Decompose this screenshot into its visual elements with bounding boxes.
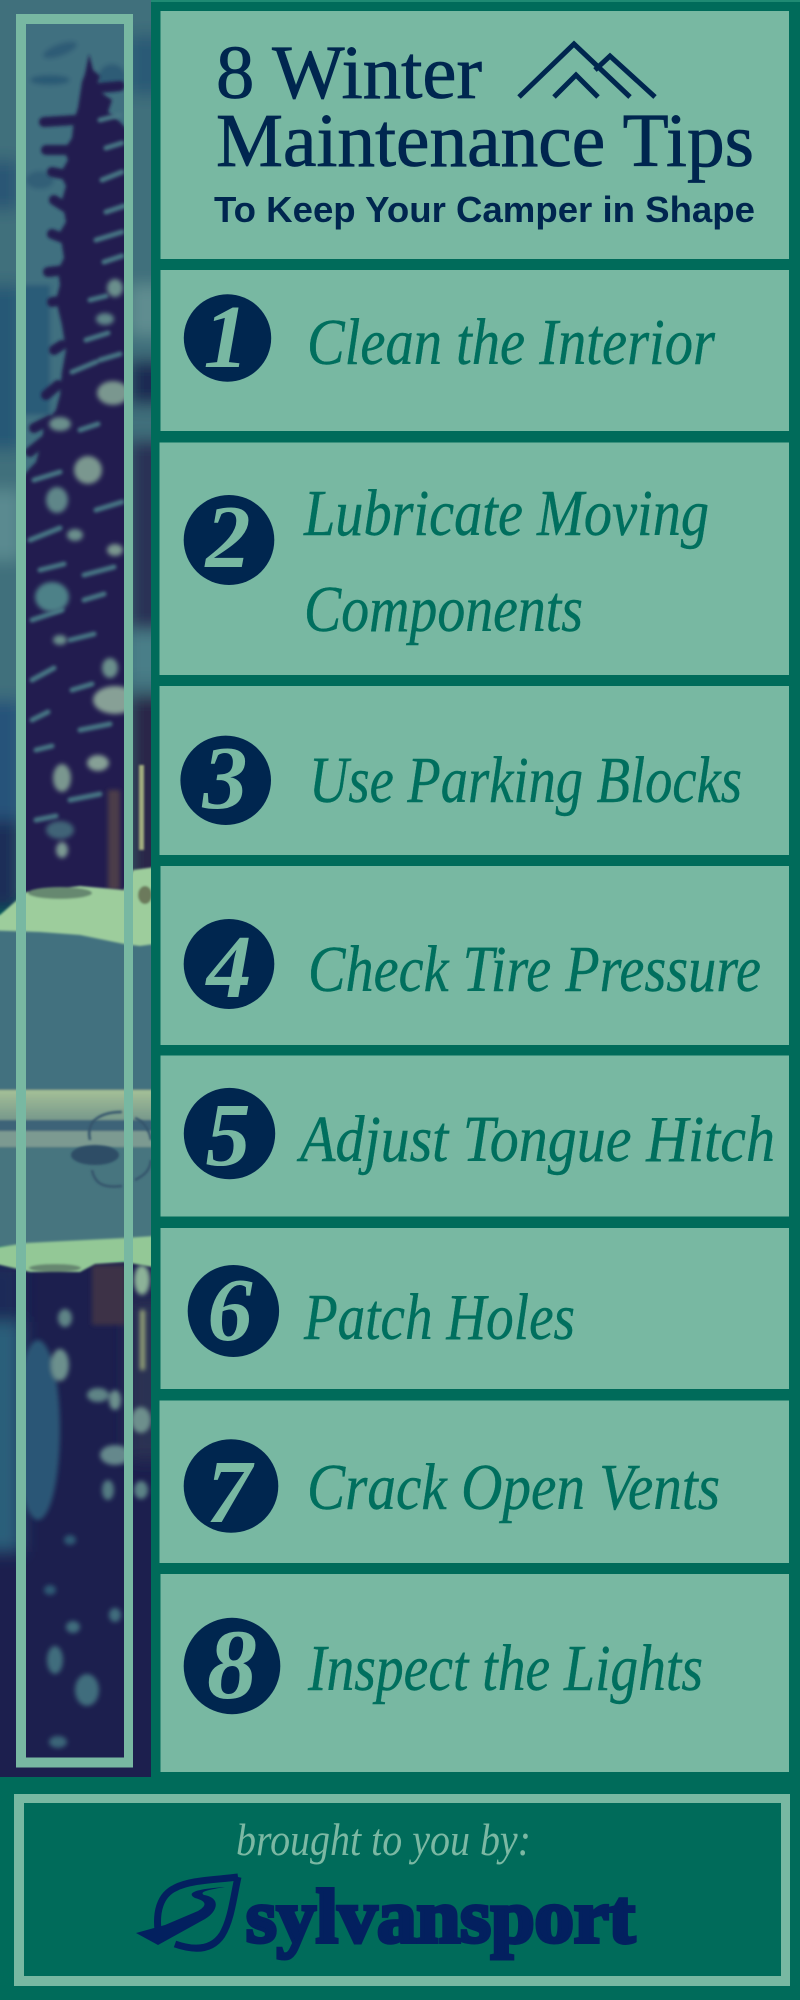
- panel: footer credit: [14, 1794, 790, 1986]
- panel: tip 8: [160, 1574, 789, 1772]
- logo: leaf mark: [136, 1877, 238, 1948]
- photo: right strip highlight: [139, 765, 144, 850]
- number badge 8: [184, 1609, 280, 1720]
- number badge 7: [184, 1439, 278, 1542]
- top edge highlight: [151, 0, 800, 2]
- panel: tip 3: [160, 686, 789, 855]
- number badge 5: 5: [206, 1086, 250, 1185]
- number badge 8: 8: [207, 1609, 257, 1720]
- number badge 4: 4: [204, 918, 252, 1017]
- number badge 2: [184, 488, 274, 587]
- subtitle: To Keep Your Camper in Shape: [214, 189, 755, 230]
- photo: lake: [0, 930, 151, 1248]
- tip text line 2: Components: [304, 573, 583, 646]
- number badge 6: 6: [208, 1261, 252, 1360]
- panel: winter photo strip: [0, 0, 151, 1777]
- photo: lower outer strips: [0, 1268, 151, 1561]
- heading: 8 Winter: 8 Winter: [216, 31, 482, 115]
- panel: title: [160, 11, 789, 259]
- tip text: Crack Open Vents: [307, 1451, 720, 1524]
- snow and branch gaps in tree: [30, 115, 124, 820]
- icon: mountains: [519, 44, 655, 97]
- pine silhouette: [20, 54, 128, 900]
- credit line: brought to you by:: [236, 1814, 531, 1865]
- number badge 1: 1: [204, 288, 248, 387]
- number badge 2: 2: [204, 488, 250, 587]
- number badge 6: [188, 1261, 279, 1360]
- photo: outer strips, mountains: [0, 0, 151, 914]
- logo: wordmark: sylvansport: [246, 1875, 635, 1959]
- snow clumps on tree: [35, 279, 137, 890]
- tree backdrop: [26, 42, 124, 415]
- number badge 4: [184, 918, 274, 1017]
- number badge 1: [184, 288, 271, 387]
- photo: lower strip details: [131, 1265, 151, 1499]
- photo: snowbanks and lake shrub: [0, 866, 151, 1274]
- lower reflection: [26, 1264, 124, 1750]
- number badge 3: 3: [202, 729, 248, 828]
- tip text line 1: Lubricate Moving: [303, 477, 709, 550]
- panel: tip 5: [160, 1056, 789, 1216]
- number badge 7: 7: [206, 1443, 254, 1542]
- heading: Maintenance Tips: Maintenance Tips: [216, 99, 754, 183]
- photo: lower base: [0, 1262, 151, 1777]
- panel: tip 1: [160, 270, 789, 431]
- tip text: Inspect the Lights: [307, 1632, 703, 1705]
- photo frame: [16, 14, 133, 1768]
- panel: tip 6: [160, 1228, 789, 1389]
- tip text: Patch Holes: [303, 1281, 575, 1354]
- photo: framed pine tree: [26, 42, 124, 1750]
- number badge 3: [180, 729, 271, 828]
- number badge 5: [184, 1086, 275, 1185]
- panel: tip 7: [160, 1400, 789, 1563]
- panel: tip 4: [160, 866, 789, 1045]
- panel: tip 2: [160, 442, 789, 675]
- tip text: Clean the Interior: [307, 306, 715, 379]
